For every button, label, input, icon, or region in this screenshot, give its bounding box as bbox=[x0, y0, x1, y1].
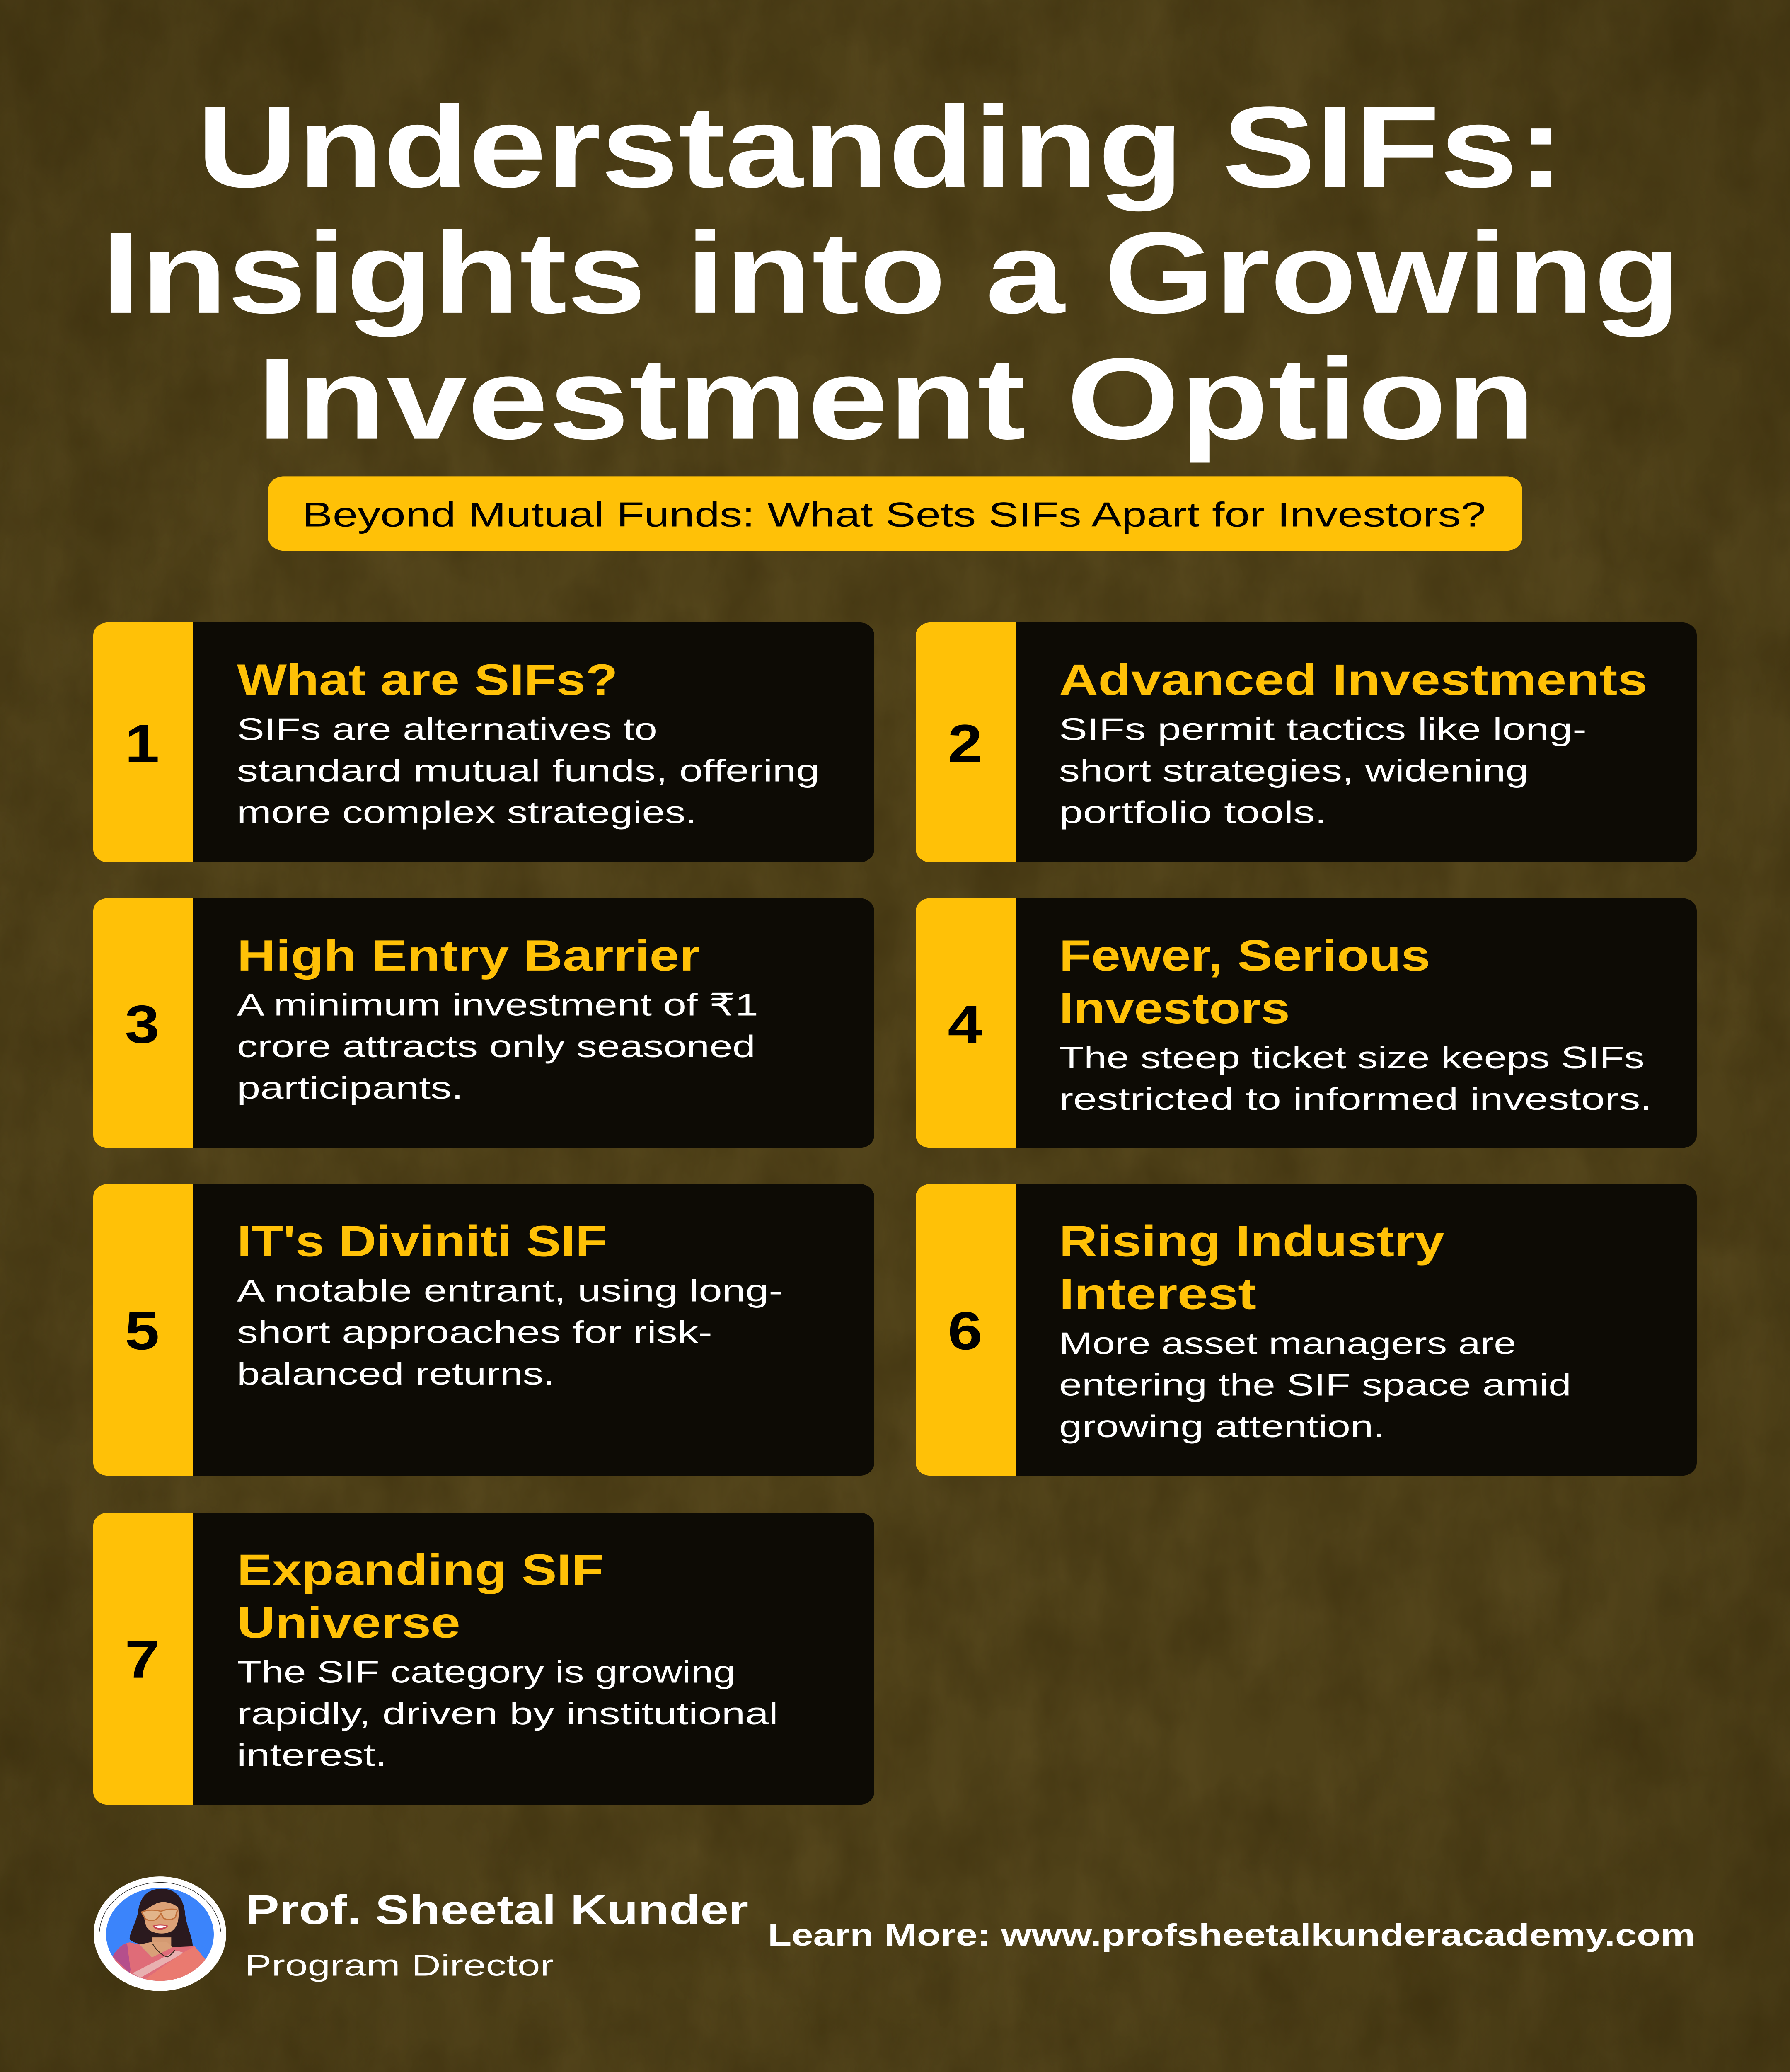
title: Insights into a Growing bbox=[101, 208, 1681, 338]
panel: card 4 fewer serious investors: 4 bbox=[948, 994, 982, 1054]
presenter name: Prof. Sheetal Kunder bbox=[245, 1886, 748, 1933]
panel: card 7 expanding SIF universe: interest. bbox=[237, 1738, 387, 1773]
panel: card 2 advanced investments: 2 bbox=[948, 713, 982, 774]
title: Investment Option bbox=[257, 334, 1536, 464]
panel: card 4 fewer serious investors: restricted to informed investors. bbox=[1059, 1082, 1652, 1117]
panel: card 5 IT's Diviniti SIF: IT's Diviniti SIF bbox=[237, 1217, 607, 1266]
panel: card 5 IT's Diviniti SIF: short approaches for risk- bbox=[237, 1315, 712, 1350]
panel: card 6 rising industry interest: 6 bbox=[948, 1301, 982, 1361]
panel: card 1 what are SIFs: more complex strategies. bbox=[237, 795, 697, 830]
panel: card 1 what are SIFs: SIFs are alternatives to bbox=[237, 712, 657, 747]
panel: card 3 high entry barrier: crore attracts only seasoned bbox=[237, 1029, 755, 1064]
subtitle pill bbox=[268, 476, 1522, 551]
panel: card 6 rising industry interest: Rising Industry bbox=[1059, 1217, 1444, 1266]
icon: portrait of Prof. Sheetal Kunder bbox=[94, 1876, 226, 1991]
panel: card 7 expanding SIF universe: 7 bbox=[125, 1629, 160, 1689]
panel: card 6 rising industry interest bbox=[916, 1184, 1697, 1476]
panel: card 1 what are SIFs bbox=[93, 622, 874, 862]
panel: card 3 high entry barrier: High Entry Barrier bbox=[237, 932, 700, 980]
panel: card 7 expanding SIF universe: Expanding SIF bbox=[237, 1546, 604, 1595]
panel: card 1 what are SIFs: What are SIFs? bbox=[237, 656, 618, 704]
panel: card 7 expanding SIF universe: Universe bbox=[237, 1598, 460, 1647]
panel: card 6 rising industry interest: entering the SIF space amid bbox=[1059, 1368, 1571, 1402]
panel: card 4 fewer serious investors: Fewer, Serious bbox=[1059, 932, 1430, 980]
panel: card 3 high entry barrier: 3 bbox=[125, 994, 160, 1054]
learn more link: Learn More: www.profsheetalkunderacademy.com bbox=[768, 1918, 1695, 1953]
panel: card 3 high entry barrier bbox=[93, 898, 874, 1148]
presenter role: Program Director bbox=[244, 1949, 554, 1982]
panel: card 2 advanced investments: Advanced Investments bbox=[1059, 656, 1647, 704]
panel: card 7 expanding SIF universe bbox=[93, 1513, 874, 1805]
panel: card 2 advanced investments: short strategies, widening bbox=[1059, 753, 1529, 788]
title: Understanding SIFs: bbox=[197, 82, 1564, 212]
panel: card 6 rising industry interest: Interest bbox=[1059, 1270, 1256, 1319]
panel: card 5 IT's Diviniti SIF: balanced returns. bbox=[237, 1356, 555, 1391]
panel: card 3 high entry barrier: A minimum investment of ₹1 bbox=[237, 988, 758, 1022]
subtitle pill: Beyond Mutual Funds: What Sets SIFs Apart for Investors? bbox=[302, 495, 1486, 534]
panel: card 4 fewer serious investors: The steep ticket size keeps SIFs bbox=[1059, 1040, 1645, 1075]
panel: card 5 IT's Diviniti SIF bbox=[93, 1184, 874, 1476]
panel: card 2 advanced investments: SIFs permit tactics like long- bbox=[1059, 712, 1587, 747]
panel: card 6 rising industry interest: growing attention. bbox=[1059, 1409, 1385, 1444]
panel: card 2 advanced investments: portfolio tools. bbox=[1059, 795, 1327, 830]
panel: card 7 expanding SIF universe: The SIF category is growing bbox=[237, 1655, 735, 1690]
title bbox=[101, 82, 1681, 464]
panel: card 2 advanced investments bbox=[916, 622, 1697, 862]
panel: card 5 IT's Diviniti SIF: A notable entrant, using long- bbox=[237, 1273, 783, 1308]
panel: card 7 expanding SIF universe: rapidly, driven by institutional bbox=[237, 1696, 778, 1731]
panel: card 3 high entry barrier: participants. bbox=[237, 1071, 463, 1106]
panel: card 5 IT's Diviniti SIF: 5 bbox=[125, 1301, 160, 1361]
panel: card 4 fewer serious investors bbox=[916, 898, 1697, 1148]
panel: card 1 what are SIFs: 1 bbox=[125, 713, 160, 774]
panel: card 6 rising industry interest: More asset managers are bbox=[1059, 1326, 1516, 1361]
panel: card 4 fewer serious investors: Investors bbox=[1059, 984, 1290, 1033]
panel: card 1 what are SIFs: standard mutual funds, offering bbox=[237, 753, 820, 788]
